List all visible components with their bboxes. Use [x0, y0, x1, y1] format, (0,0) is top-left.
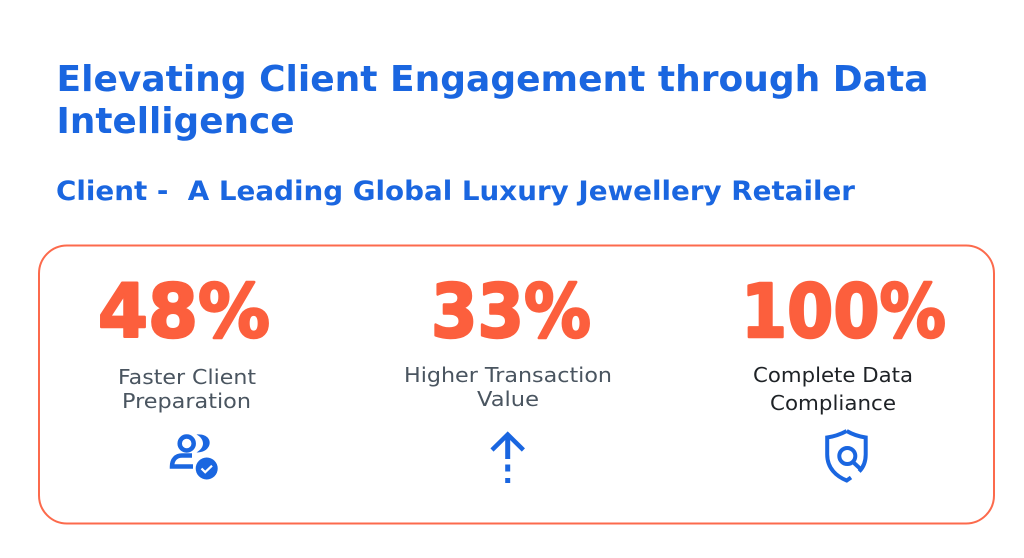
- metric: complete data compliance: [741, 269, 946, 480]
- metric: faster client preparation: Faster Client: [118, 365, 256, 389]
- panel: results: [39, 246, 994, 524]
- subtitle: Client - A Leading Global Luxury Jewellery Retailer: [56, 176, 856, 207]
- metric: higher transaction value: 33%: [431, 269, 591, 355]
- title: Intelligence: [56, 101, 294, 142]
- metric: complete data compliance: Compliance: [770, 391, 896, 415]
- metric: faster client preparation: Preparation: [122, 389, 251, 413]
- metric: higher transaction value: Value: [477, 387, 539, 411]
- metric: faster client preparation: [98, 269, 270, 480]
- icon: client check: [172, 434, 218, 480]
- metric: higher transaction value: Higher Transaction: [404, 363, 612, 387]
- icon: dashed up arrow: [492, 434, 523, 483]
- icon: shield search: [827, 431, 866, 480]
- metric: higher transaction value: [404, 269, 612, 483]
- metric: complete data compliance: 100%: [741, 269, 946, 355]
- title: [56, 59, 929, 142]
- title: Elevating Client Engagement through Data: [56, 59, 929, 100]
- metric: faster client preparation: 48%: [98, 269, 270, 355]
- metric: complete data compliance: Complete Data: [753, 363, 913, 387]
